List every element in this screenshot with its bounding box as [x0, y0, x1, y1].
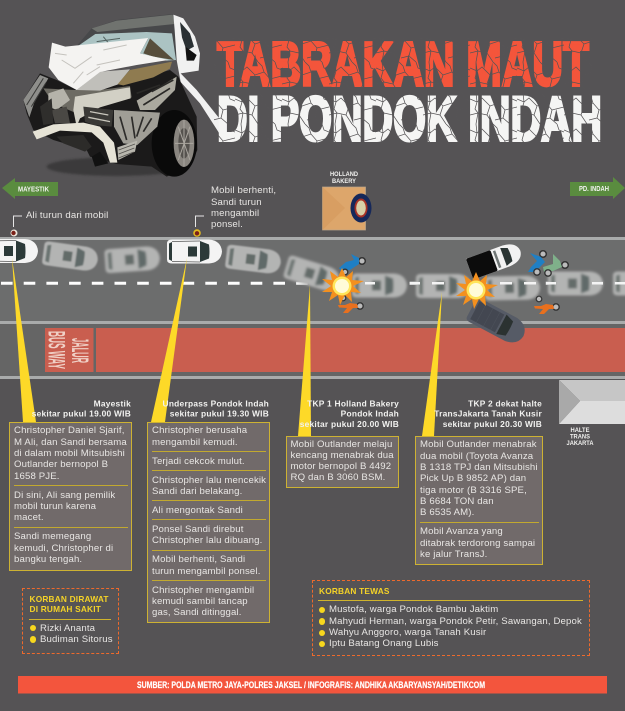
halte transjakarta — [559, 380, 625, 447]
white car: ali — [0, 239, 38, 263]
text: event 3 — [152, 475, 266, 497]
text: event 7: gas, Sandi ditinggal. — [152, 607, 242, 618]
text: event 1: Christopher berusaha — [152, 425, 247, 436]
name: mustofa: Mustofa, warga Pondok Bambu Jaktim — [329, 604, 498, 615]
pointer: mayestik — [12, 258, 36, 422]
motorcycle: blue 2 — [528, 251, 546, 275]
text: event 5 — [152, 524, 262, 546]
text: event 5: Christopher lalu dibuang. — [152, 535, 262, 546]
text: JALUR — [66, 338, 93, 363]
arrow: pd. indah: PD. INDAH — [579, 186, 609, 193]
source bar — [18, 676, 607, 694]
person: sandi — [193, 229, 201, 237]
bullet: wahyu — [319, 630, 325, 636]
motorcycle: orange 2 — [534, 296, 559, 314]
heading: tkp 2: TKP 2 dekat halte — [468, 398, 542, 408]
halte transjakarta: HALTE — [570, 427, 590, 434]
text: first paragraph — [14, 425, 127, 482]
heading: tkp 2: sekitar pukul 20.30 WIB — [443, 419, 542, 429]
annotation: mobil berhenti: Sandi turun — [211, 197, 262, 208]
arrow: mayestik: MAYESTIK — [18, 186, 49, 194]
redraw centre line over ghost cars — [365, 282, 625, 284]
panel: tkp 1 — [286, 436, 399, 488]
text: event 6: Mobil berhenti, Sandi — [152, 554, 245, 565]
text: event 7 — [152, 585, 254, 618]
text: first paragraph: 1658 PJE. — [14, 470, 60, 482]
heading: underpass — [163, 398, 269, 419]
bus way lane — [42, 328, 625, 372]
panel: mayestik — [9, 422, 132, 570]
heading: underpass: Underpass Pondok Indah — [163, 398, 269, 408]
panel: tkp 1: kencang menabrak dua — [290, 450, 394, 461]
white car: sandi — [167, 240, 222, 264]
text: second paragraph: Mobil Avanza yang — [420, 526, 503, 537]
heading: tkp 1: TKP 1 Holland Bakery — [307, 398, 399, 408]
bullet: mahyudi — [319, 618, 325, 625]
heading: tkp 1: sekitar pukul 20.00 WIB — [300, 419, 399, 429]
dashed frame — [22, 588, 119, 654]
text: second paragraph: macet. — [14, 512, 44, 523]
heading: tkp 1 — [300, 398, 399, 429]
text: first paragraph: B 6684 TON dan — [420, 496, 494, 507]
dashed frame — [312, 580, 590, 656]
text: first paragraph: M Ali, dan Sandi bersama — [14, 437, 127, 448]
bullet: budiman — [30, 636, 36, 643]
text: first paragraph: di dalam mobil Mitsubishi — [14, 448, 125, 459]
text: first paragraph: tiga motor (B 3316 SPE, — [420, 485, 527, 496]
text: second paragraph: Di sini, Ali sang pemilik — [14, 490, 115, 501]
pickup — [466, 240, 524, 280]
name: budiman: Budiman Sitorus — [40, 634, 113, 645]
text: event 3: Christopher lalu mencekik — [152, 475, 266, 486]
source bar: SUMBER: POLDA METRO JAYA-POLRES JAKSEL / INFOGRAFIS: ANDHIKA AKBARYANSYAH/DETIKCOM — [137, 680, 485, 691]
name: mahyudi: Mahyudi Herman, warga Pondok Petir, Sawangan, Depok — [329, 616, 582, 627]
pointer: tkp 2 — [422, 292, 442, 436]
heading: mayestik: sekitar pukul 19.00 WIB — [32, 409, 131, 419]
text: event 3: Sandi dari belakang. — [152, 486, 242, 497]
pointer: tkp 1 — [298, 285, 311, 436]
panel: tkp 2 — [415, 436, 542, 565]
leader line: sandi — [196, 216, 204, 227]
text: third paragraph: Sandi memegang — [14, 531, 91, 542]
holland bakery building — [322, 171, 372, 230]
panel: underpass — [147, 422, 270, 623]
text: third paragraph — [14, 531, 113, 565]
heading: korban tewas: KORBAN TEWAS — [319, 586, 390, 596]
panel: tkp 1: RQ dan B 3060 BSM. — [290, 472, 385, 483]
text: third paragraph: bangku tengah. — [14, 554, 82, 565]
annotation: mobil berhenti: Mobil berhenti, — [211, 185, 276, 196]
heading: korban dirawat: KORBAN DIRAWAT — [30, 594, 109, 604]
motorcycle: green — [543, 254, 568, 276]
heading: korban dirawat: DI RUMAH SAKIT — [30, 604, 101, 614]
heading: mayestik: Mayestik — [94, 398, 131, 408]
text: second paragraph: ditabrak terdorong sampai — [420, 538, 535, 549]
text: event 6 — [152, 554, 261, 577]
heading: tkp 1: Pondok Indah — [341, 409, 399, 419]
person: ali — [10, 230, 18, 236]
leader line: ali — [14, 216, 22, 227]
text: first paragraph: Outlander bernopol B — [14, 459, 108, 470]
text: second paragraph: ke jalur TransJ. — [420, 549, 487, 560]
suv outlander — [465, 297, 530, 348]
halte transjakarta: JAKARTA — [566, 440, 594, 447]
motorcycle: blue 1 — [339, 254, 365, 275]
text: first paragraph: B 6535 AM). — [420, 507, 474, 518]
panel: korban dirawat — [22, 588, 119, 654]
holland bakery building: HOLLAND — [330, 171, 358, 178]
text: first paragraph: B 1318 TPJ dan Mitsubishi — [420, 462, 538, 473]
ghost cars — [42, 241, 625, 300]
text: first paragraph: Christopher Daniel Sjarif, — [14, 425, 125, 436]
text: first paragraph: dua mobil (Toyota Avanza — [420, 451, 533, 462]
heading: tkp 2 — [434, 398, 542, 429]
text: event 5: Ponsel Sandi direbut — [152, 524, 244, 535]
heading: korban dirawat — [30, 594, 109, 614]
text: event 1 — [152, 425, 248, 448]
heading: tkp 2: TransJakarta Tanah Kusir — [434, 409, 542, 419]
arrow: mayestik — [2, 178, 58, 199]
crashed car photo — [23, 14, 224, 177]
annotation: ali turun: Ali turun dari mobil — [26, 210, 108, 221]
bullet: iptu — [319, 641, 325, 647]
heading: mayestik — [32, 398, 131, 419]
text: event 1: mengambil kemudi. — [152, 437, 238, 448]
panel: tkp 1: motor bernopol B 4492 — [290, 461, 391, 472]
text: event 4: Ali mengontak Sandi — [152, 505, 243, 516]
text: second paragraph: mobil turun karena — [14, 501, 96, 512]
text: event 7: kemudi sambil tancap — [152, 596, 248, 607]
text: third paragraph: kemudi, Christopher di — [14, 543, 113, 554]
pointer: underpass — [151, 258, 187, 422]
text: BUS WAY — [42, 331, 70, 369]
heading: underpass: sekitar pukul 19.30 WIB — [170, 409, 269, 419]
text: event 2: Terjadi cekcok mulut. — [152, 456, 245, 467]
text: first paragraph: Pick Up B 9852 AP) dan — [420, 473, 526, 484]
text: first paragraph — [420, 439, 538, 518]
text: event 7: Christopher mengambil — [152, 585, 254, 596]
bullet: rizki — [30, 625, 36, 631]
annotation: mobil berhenti — [211, 185, 276, 230]
text: second paragraph — [14, 490, 116, 523]
panel: korban tewas — [312, 580, 590, 656]
name: iptu: Iptu Batang Onang Lubis — [329, 638, 439, 649]
bullet: mustofa — [319, 607, 325, 613]
text: first paragraph: Mobil Outlander menabrak — [420, 439, 537, 450]
road — [0, 237, 625, 379]
arrow: pd. indah — [570, 177, 625, 199]
explosion 1 — [322, 268, 364, 305]
holland bakery building: BAKERY — [332, 178, 357, 185]
explosion 2 — [456, 272, 498, 309]
text: event 6: turun mengambil ponsel. — [152, 566, 261, 577]
annotation: mobil berhenti: mengambil — [211, 208, 259, 219]
text: second paragraph — [420, 526, 535, 560]
name: rizki: Rizki Ananta — [40, 622, 95, 634]
annotation: mobil berhenti: ponsel. — [211, 219, 243, 230]
motorcycle: orange 1 — [338, 295, 363, 313]
panel: tkp 1: Mobil Outlander melaju — [290, 438, 392, 450]
halte transjakarta: TRANS — [570, 434, 591, 440]
name: wahyu: Wahyu Anggoro, warga Tanah Kusir — [329, 627, 486, 638]
